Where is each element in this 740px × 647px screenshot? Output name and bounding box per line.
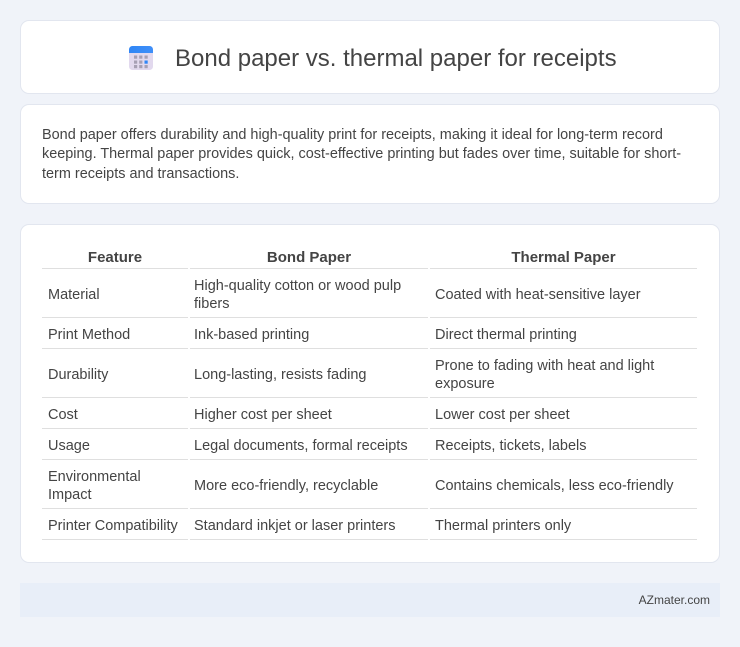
row: Material: Coated with heat-sensitive layer [435, 287, 641, 303]
row: Environmental Impact: Contains chemicals, less eco-friendly [435, 478, 674, 494]
row: Cost: Lower cost per sheet [435, 407, 570, 423]
icon: calendar [129, 46, 153, 70]
summary text: keeping. Thermal paper provides quick, cost-effective printing but fades over time, suitable for short- [42, 146, 681, 162]
row: Cost: Higher cost per sheet [194, 407, 332, 423]
row: Durability: exposure [435, 376, 495, 392]
row: Usage: Usage [48, 438, 90, 454]
row: Material: Material [48, 287, 100, 303]
row: Cost [48, 407, 570, 423]
row: Environmental Impact: More eco-friendly, recyclable [194, 478, 378, 494]
header: Feature: Feature [88, 249, 142, 266]
summary text: term receipts and transactions. [42, 166, 239, 182]
row: Durability [48, 358, 654, 392]
row: Print Method: Ink-based printing [194, 327, 309, 343]
footer source text: AZmater.com [639, 593, 710, 607]
comparison table [42, 249, 697, 540]
row: Material: fibers [194, 296, 229, 312]
row: Print Method: Print Method [48, 327, 130, 343]
row: Printer Compatibility: Standard inkjet or laser printers [194, 518, 396, 534]
row: Cost: Cost [48, 407, 78, 423]
row: Printer Compatibility [48, 518, 572, 534]
row: Usage [48, 438, 587, 454]
row: Usage: Receipts, tickets, labels [435, 438, 587, 454]
row: Printer Compatibility: Thermal printers only [435, 518, 571, 534]
row: Durability: Durability [48, 367, 108, 383]
summary text: Bond paper offers durability and high-quality print for receipts, making it ideal for long-term record [42, 127, 663, 143]
row: Environmental Impact: Impact [48, 487, 92, 503]
row: Durability: Long-lasting, resists fading [194, 367, 366, 383]
summary text [42, 127, 681, 182]
row: Environmental Impact [48, 469, 674, 503]
row: Printer Compatibility: Printer Compatibility [48, 518, 178, 534]
summary panel [20, 104, 720, 204]
row: Print Method: Direct thermal printing [435, 327, 577, 343]
title panel [20, 20, 720, 94]
header: Bond Paper: Bond Paper [267, 249, 351, 266]
row: Material: High-quality cotton or wood pulp [194, 278, 401, 294]
row: Environmental Impact: Environmental [48, 469, 141, 485]
row: Durability: Prone to fading with heat and light [435, 358, 654, 374]
comparison table panel [20, 224, 720, 563]
header: Thermal Paper: Thermal Paper [511, 249, 616, 266]
row: Material [48, 278, 641, 312]
row: Print Method [48, 327, 577, 343]
row: Usage: Legal documents, formal receipts [194, 438, 408, 454]
title: Bond paper vs. thermal paper for receipts [175, 45, 617, 72]
footer bar [20, 583, 720, 617]
